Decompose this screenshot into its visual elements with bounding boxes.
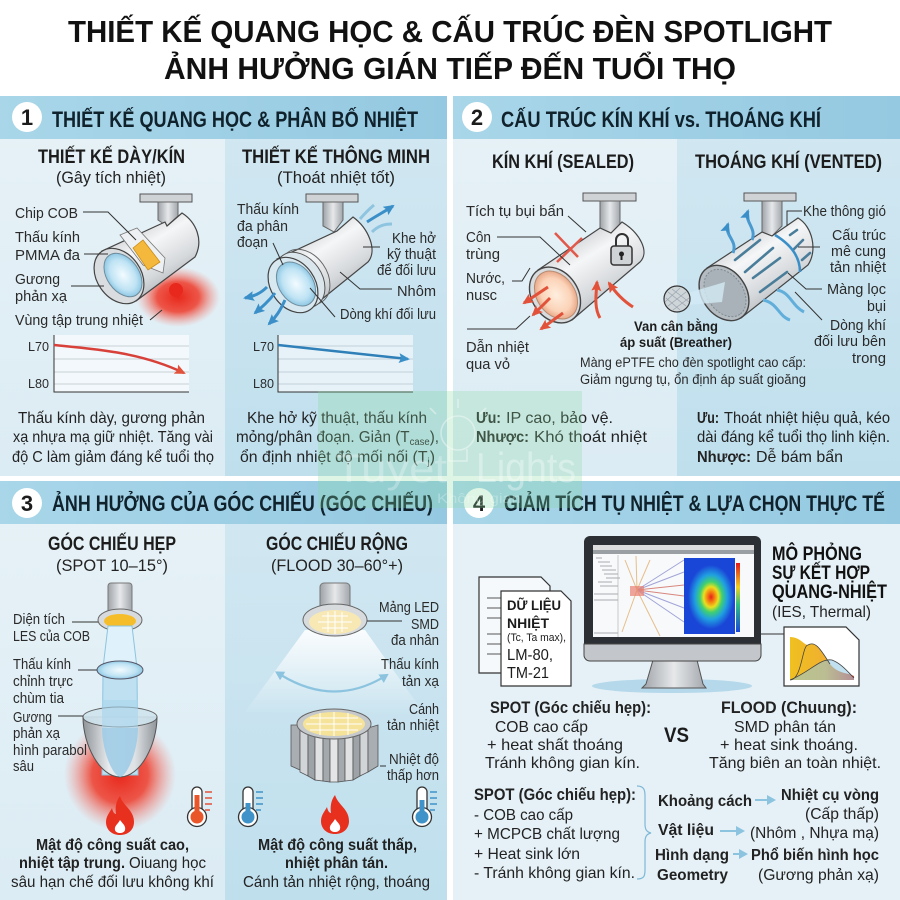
labels: vented lamp: Khe thông gió <box>803 203 886 220</box>
icon: thermal data documents: (Tc, Ta max), <box>507 632 566 644</box>
labels: smart lamp: đa phân <box>237 218 288 235</box>
panel 2 heading: CẤU TRÚC KÍN KHÍ vs. THOÁNG KHÍ <box>501 107 822 132</box>
labels: wide beam: tản xạ <box>402 673 440 690</box>
right column heading <box>242 146 430 187</box>
labels: narrow beam: chùm tia <box>13 690 65 707</box>
icon: flame left <box>106 796 134 835</box>
labels: vented lamp <box>787 203 887 367</box>
icon: heat sink <box>291 709 378 782</box>
labels: vented lamp: Màng lọc <box>827 281 886 298</box>
labels: smart lamp: Dòng khí đối lưu <box>340 306 436 323</box>
number badge 4: 4 <box>473 491 486 516</box>
text: spot checklist: SPOT (Góc chiếu hẹp): <box>474 785 636 804</box>
text: sealed pros and cons: Nhược: <box>476 429 529 446</box>
text: vented pros and cons: dài đáng kể tuổi thọ linh kiện. <box>697 428 890 446</box>
text: sealed pros and cons: IP cao, bảo vệ. <box>506 410 613 427</box>
text: sealed pros and cons: Ưu: <box>476 410 501 427</box>
factor table: Geometry <box>657 867 728 884</box>
text: narrow beam conclusion <box>11 837 215 891</box>
labels: smart lamp: đoạn <box>237 234 268 251</box>
labels: smart lamp: Thấu kính <box>237 201 299 218</box>
text: simulation heading: (IES, Thermal) <box>772 604 871 621</box>
panel 1 heading: THIẾT KẾ QUANG HỌC & PHÂN BỐ NHIỆT <box>52 106 418 132</box>
labels: wide beam: thấp hơn <box>387 767 439 784</box>
labels: sealed lamp: phản xạ <box>15 288 68 305</box>
labels: vented lamp: Cấu trúc <box>832 227 886 244</box>
icon: flame right <box>321 795 349 834</box>
text: smart design description: case <box>410 437 430 448</box>
text: spot comparison: Tránh không gian kín. <box>485 755 640 772</box>
right column heading: (Thoát nhiệt tốt) <box>277 168 395 187</box>
number badge 1: 1 <box>21 105 33 130</box>
text: spot comparison: + heat shất thoáng <box>487 737 623 754</box>
factor table: Vật liệu <box>658 822 714 839</box>
text: vented pros and cons: Thoát nhiệt hiệu quả, kéo <box>724 410 890 427</box>
chart: L70 blue slow decline <box>253 335 413 392</box>
text: spot comparison <box>485 698 651 772</box>
icon: breather membrane <box>664 282 725 312</box>
text: vented pros and cons <box>697 410 890 466</box>
labels: wide beam: tản nhiệt <box>387 717 440 734</box>
text: narrow beam conclusion: sâu hạn chế đối lưu không khí <box>11 874 215 891</box>
text: wide beam conclusion: nhiệt phân tán. <box>285 855 388 872</box>
arrows: vented airflow <box>727 211 804 320</box>
text: narrow beam conclusion: Oiuang học <box>129 855 206 872</box>
icon: padlock <box>611 234 632 265</box>
chart: L70 blue slow decline: L70 <box>253 339 274 354</box>
labels: sealed lamp: Dẫn nhiệt <box>466 339 530 356</box>
brace <box>637 786 651 879</box>
factor table: Hình dạng <box>655 847 729 864</box>
labels: wide beam <box>367 599 440 784</box>
text: smart design description: ) <box>430 449 435 466</box>
labels: smart lamp: để đối lưu <box>377 262 436 279</box>
panel 3: beam angle effect <box>0 481 447 900</box>
labels: smart lamp: kỹ thuật <box>387 246 437 263</box>
text: wide beam conclusion: Mật độ công suất thấp, <box>258 837 417 854</box>
icon: smart spotlight with airflow <box>258 194 372 322</box>
text: breather note: Giảm ngưng tụ, ổn định áp suất gioăng <box>580 372 806 387</box>
text: sealed pros and cons: Khó thoát nhiệt <box>534 429 648 446</box>
text: breather note: Màng ePTFE cho đèn spotlight cao cấp: <box>580 355 806 370</box>
title: ẢNH HƯỞNG GIÁN TIẾP ĐẾN TUỔI THỌ <box>164 50 736 86</box>
panel 4: reducing heat buildup <box>453 481 900 900</box>
text: smart design description: ổn định nhiệt độ mối nối (T <box>240 449 429 466</box>
labels: vented lamp: tản nhiệt <box>830 259 887 276</box>
text: flood comparison: FLOOD (Chuung): <box>721 698 857 717</box>
chart: L70 red decline: L80 <box>28 376 49 391</box>
icon: thermal data documents: DỮ LIỆU <box>507 596 561 613</box>
text: sealed design description: độ C làm giảm đáng kể tuổi thọ <box>12 448 214 466</box>
watermark: Tuyet <box>335 447 447 491</box>
panel 3 heading: ẢNH HƯỞNG CỦA GÓC CHIẾU (GÓC CHIẾU) <box>52 491 433 516</box>
number badge 2 <box>462 102 492 132</box>
labels: wide beam: Nhiệt độ <box>389 751 439 768</box>
panel 1: optical design and heat distribution <box>0 96 447 476</box>
arrows: red heat <box>524 282 633 329</box>
number badge 3: 3 <box>21 491 33 516</box>
chart: L70 red decline: L70 <box>28 339 49 354</box>
icon: vented spotlight <box>689 193 813 330</box>
text: breather note: áp suất (Breather) <box>620 335 732 350</box>
wide beam heading: GÓC CHIẾU RỘNG <box>266 533 408 555</box>
icon: thick sealed spotlight <box>84 194 199 313</box>
labels: sealed lamp: trùng <box>466 246 500 263</box>
text: vented pros and cons: Dễ bám bẩn <box>756 447 843 466</box>
labels: sealed lamp: qua vỏ <box>466 356 510 373</box>
text: breather note: Van cân bằng <box>634 319 718 334</box>
labels: narrow beam: chỉnh trực <box>13 673 73 690</box>
chart: L70 blue slow decline: L80 <box>253 376 274 391</box>
narrow beam heading: (SPOT 10–15°) <box>56 556 168 575</box>
labels: narrow beam: LES của COB <box>13 628 90 645</box>
labels: sealed lamp <box>15 205 162 329</box>
text: spot checklist: - Tránh không gian kín. <box>474 865 635 882</box>
labels: sealed lamp: Thấu kính <box>15 229 80 246</box>
labels: wide beam: Mảng LED <box>379 599 439 616</box>
narrow beam heading: GÓC CHIẾU HẸP <box>48 533 176 555</box>
labels: narrow beam: Diện tích <box>13 611 65 628</box>
icon: hot thermometer <box>188 787 212 826</box>
text: narrow beam conclusion: nhiệt tập trung. <box>19 855 125 872</box>
factor table <box>655 787 879 884</box>
icon: cool thermometer right <box>412 787 437 826</box>
icon: sealed spotlight <box>519 193 644 333</box>
text: smart design description: j <box>427 457 430 468</box>
text: simulation heading: MÔ PHỎNG <box>772 543 862 565</box>
labels: narrow beam: Gương <box>13 709 52 726</box>
text: sealed pros and cons <box>476 410 648 446</box>
labels: narrow beam: phản xạ <box>13 725 61 742</box>
icon: thermal data documents: LM-80, <box>507 647 553 664</box>
text: vented pros and cons: Ưu: <box>697 410 719 427</box>
icon: LED flood head <box>303 583 367 636</box>
labels: smart lamp: Nhôm <box>397 283 436 300</box>
heat glow under reflector <box>64 719 176 831</box>
text: flood comparison: Tăng biên an toàn nhiệt. <box>709 755 881 772</box>
watermark <box>318 391 582 508</box>
labels: sealed lamp: Côn <box>466 229 491 246</box>
labels: narrow beam <box>13 611 98 775</box>
text: breather note <box>580 319 806 387</box>
text: smart design description: ), <box>430 429 439 446</box>
sealed heading: KÍN KHÍ (SEALED) <box>492 151 634 173</box>
arrow: beam spread <box>281 675 387 692</box>
text: spot checklist: + Heat sink lớn <box>474 846 580 863</box>
text: flood comparison: + heat sink thoáng. <box>720 737 858 754</box>
factor table: (Cấp thấp) <box>805 806 879 823</box>
labels: sealed lamp: PMMA đa <box>15 247 81 264</box>
watermark: Không gian <box>437 490 521 506</box>
text: spot checklist: + MCPCB chất lượng <box>474 826 620 843</box>
text: sealed design description <box>12 410 214 466</box>
labels: vented lamp: trong <box>852 350 886 367</box>
labels: sealed lamp: Vùng tập trung nhiệt <box>15 312 144 329</box>
icon: monitor with thermal simulation <box>584 536 761 693</box>
icon: result chart document <box>761 627 859 686</box>
labels: sealed lamp: Nước, <box>466 270 505 287</box>
number badge 3 <box>12 488 42 518</box>
labels: sealed lamp: nusc <box>466 287 497 304</box>
icon: thermal data documents: NHIỆT <box>507 614 549 631</box>
text: spot checklist: - COB cao cấp <box>474 807 573 824</box>
title: THIẾT KẾ QUANG HỌC & CẤU TRÚC ĐÈN SPOTLIGHT <box>68 13 832 49</box>
text: wide beam conclusion: Cánh tản nhiệt rộng, thoáng <box>243 874 430 891</box>
text: sealed design description: Thấu kính dày, gương phản <box>18 410 205 427</box>
wide beam heading <box>266 533 408 575</box>
heat zone glow <box>136 267 220 327</box>
panel 2: sealed vs vented <box>453 96 900 476</box>
text: flood comparison <box>709 698 881 772</box>
title <box>68 13 832 86</box>
left column heading: (Gây tích nhiệt) <box>56 168 166 187</box>
text: spot comparison: SPOT (Góc chiếu hẹp): <box>490 698 651 717</box>
number badge 4 <box>464 488 494 518</box>
right column heading: THIẾT KẾ THÔNG MINH <box>242 146 430 168</box>
text: smart design description <box>236 410 439 468</box>
text: spot checklist <box>474 785 636 882</box>
labels: narrow beam: Thấu kính <box>13 656 71 673</box>
text: vented pros and cons: Nhược: <box>697 449 751 466</box>
labels: sealed lamp: Tích tụ bụi bẩn <box>466 203 564 220</box>
icon: red X <box>555 233 582 262</box>
chart: L70 red decline <box>28 335 189 392</box>
text: smart design description: mỏng/phân đoạn. Giản (T <box>236 429 418 446</box>
factor table: (Gương phản xạ) <box>758 867 879 884</box>
factor table: Khoảng cách <box>658 793 752 810</box>
icon: thermal data documents: TM-21 <box>507 665 549 682</box>
watermark: Lights <box>476 444 576 491</box>
arrows: airflow <box>245 205 393 324</box>
text: smart design description: Khe hở kỹ thuật, thấu kính <box>247 410 427 427</box>
labels: sealed lamp: Chip COB <box>15 205 78 222</box>
text: simulation heading <box>772 543 887 621</box>
left column heading <box>38 146 185 187</box>
narrow beam heading <box>48 533 176 575</box>
number badge 2: 2 <box>471 105 483 130</box>
labels: wide beam: Cánh <box>409 701 439 718</box>
labels: narrow beam: hình parabol <box>13 742 87 759</box>
text: sealed design description: xạ nhựa mạ giữ nhiệt. Tăng vài <box>13 429 213 446</box>
labels: wide beam: Thấu kính <box>381 656 439 673</box>
labels: smart lamp <box>237 201 437 323</box>
labels: wide beam: đa nhân <box>391 632 439 649</box>
factor table: Nhiệt cụ vòng <box>781 787 879 804</box>
factor table: (Nhôm , Nhựa mạ) <box>750 825 879 842</box>
number badge 1 <box>12 102 42 132</box>
text: narrow beam conclusion: Mật độ công suất cao, <box>36 837 189 854</box>
wide beam heading: (FLOOD 30–60°+) <box>271 556 403 575</box>
text: VS: VS <box>664 724 689 747</box>
labels: vented lamp: mê cung <box>831 243 886 260</box>
icon: cool thermometer left <box>238 787 263 826</box>
factor table: Phổ biến hình học <box>751 846 879 864</box>
text: flood comparison: SMD phân tán <box>734 719 836 736</box>
labels: smart lamp: Khe hở <box>392 230 436 247</box>
labels: narrow beam: sâu <box>13 758 34 775</box>
icon: thermal data documents <box>479 577 571 686</box>
labels: sealed lamp <box>466 203 586 373</box>
labels: sealed lamp: Gương <box>15 271 60 288</box>
text: wide beam conclusion <box>243 837 430 891</box>
icon: narrow beam optics <box>83 583 157 777</box>
labels: vented lamp: Dòng khí <box>830 317 887 334</box>
labels: vented lamp: đối lưu bên <box>814 333 886 350</box>
labels: wide beam: SMD <box>411 616 439 633</box>
labels: vented lamp: bụi <box>867 298 886 315</box>
left column heading: THIẾT KẾ DÀY/KÍN <box>38 146 185 168</box>
text: spot comparison: COB cao cấp <box>495 719 588 736</box>
icon: wide beam cone <box>245 630 425 715</box>
text: simulation heading: SỰ KẾT HỢP <box>772 562 870 584</box>
